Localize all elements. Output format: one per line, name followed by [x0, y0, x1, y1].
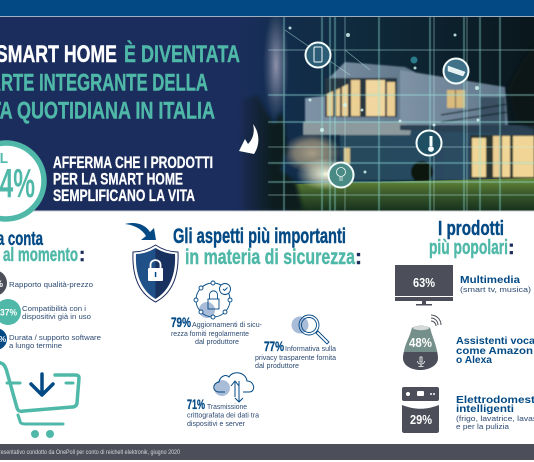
hero bottom edge: [0, 210, 534, 212]
arrow: white curved: [239, 124, 258, 154]
label: multimedia: (smart tv, musica): [460, 285, 532, 294]
stat circle 74%: [0, 143, 44, 219]
heading: prodotti popolari: [429, 218, 515, 259]
stat: 79%: [171, 314, 263, 346]
icon: tv 63%: [395, 265, 453, 306]
stat: 79%: dal produttore: [195, 339, 239, 346]
icon: light bulb circle: [328, 162, 354, 188]
heading: aspetti sicurezza: [173, 225, 362, 269]
item: compatibilita: [0, 299, 91, 325]
title: È DIVENTATA: [124, 40, 240, 68]
stat: 77%: 77%: [264, 338, 284, 354]
heading: cosa conta al momento: :: [79, 245, 85, 266]
label: assistenti vocali: o Alexa: [456, 354, 492, 366]
title: [0, 40, 240, 124]
item: rapporto qualita-prezzo: [0, 270, 93, 296]
label: elettrodomestici: [456, 394, 534, 431]
heading: aspetti sicurezza: Gli aspetti più importanti: [173, 225, 346, 248]
item: rapporto qualita-prezzo: Rapporto qualità-prezzo: [9, 280, 93, 289]
heading: prodotti popolari: I prodotti: [438, 218, 504, 240]
heading: cosa conta al momento: al momento: [3, 245, 78, 266]
item: durata: a lungo termine: [9, 341, 62, 350]
icon: cloud transfer: [214, 373, 254, 402]
grass: [290, 178, 534, 211]
hero navy fade: [236, 17, 276, 211]
stat: 71%: dispositivi e server: [187, 421, 246, 428]
stat: 71%: crittografata dei dati tra: [187, 412, 259, 420]
item: durata: Durata / supporto software: [9, 333, 101, 342]
icon: smartphone circle: [306, 42, 330, 68]
item: compatibilita: 37%: [0, 308, 17, 318]
icon: thermometer circle: [416, 130, 442, 156]
icon: appliance 29%: 29%: [410, 412, 432, 427]
footer bar: [0, 444, 534, 460]
hero statement: AFFERMA CHE I PRODOTTI: [53, 154, 213, 172]
trees: [240, 45, 534, 211]
stat: 71%: 71%: [187, 396, 205, 412]
icon: magnifier: [292, 315, 329, 344]
heading: aspetti sicurezza: in materia di sicurezza: [185, 246, 355, 269]
heading: aspetti sicurezza: :: [355, 246, 362, 269]
icon: smart speaker 48%: [403, 315, 441, 370]
icon: smart speaker 48%: 48%: [409, 335, 432, 350]
hero photo: smart house at night: [220, 9, 534, 211]
label: multimedia: Multimedia: [460, 274, 520, 286]
grid lines: [268, 17, 534, 211]
icon: tv 63%: 63%: [413, 275, 435, 290]
label: assistenti vocali: [456, 335, 534, 366]
arrow: blue curved: [125, 223, 156, 240]
item: compatibilita: dispositivi già in uso: [22, 312, 91, 321]
label: elettrodomestici: intelligenti: [456, 403, 514, 415]
stat: 71%: Trasmissione: [207, 404, 247, 411]
stat: 79%: rezza forniti regolarmente: [171, 331, 249, 338]
label: elettrodomestici: e per la pulizia: [456, 422, 510, 431]
hero statement: [53, 154, 213, 205]
stat: 77%: dal produttore: [255, 363, 299, 370]
hero statement: PER LA SMART HOME: [53, 170, 183, 188]
stat: 77%: [255, 338, 336, 370]
stat: 79%: Aggiornamenti di sicu-: [192, 322, 263, 329]
heading: prodotti popolari: :: [508, 237, 515, 259]
stat: 71%: [187, 396, 259, 428]
stat: 79%: 79%: [171, 314, 191, 330]
stat: 77%: Informativa sulla: [285, 346, 336, 353]
heading: cosa conta al momento: [0, 229, 85, 266]
stat: 77%: privacy trasparente fornita: [255, 355, 336, 362]
item: durata: [0, 328, 101, 350]
top bar: [0, 0, 534, 17]
icon: camera circle: [444, 58, 468, 84]
icon: shopping cart: [0, 362, 79, 438]
label: multimedia: [460, 274, 532, 294]
hero statement: SEMPLIFICANO LA VITA: [53, 187, 195, 205]
icon: appliance 29%: [402, 387, 439, 433]
icon: network padlock: [194, 281, 232, 319]
icon: shield with padlock: [133, 245, 178, 302]
item: compatibilita: Compatibilità con i: [22, 304, 86, 313]
